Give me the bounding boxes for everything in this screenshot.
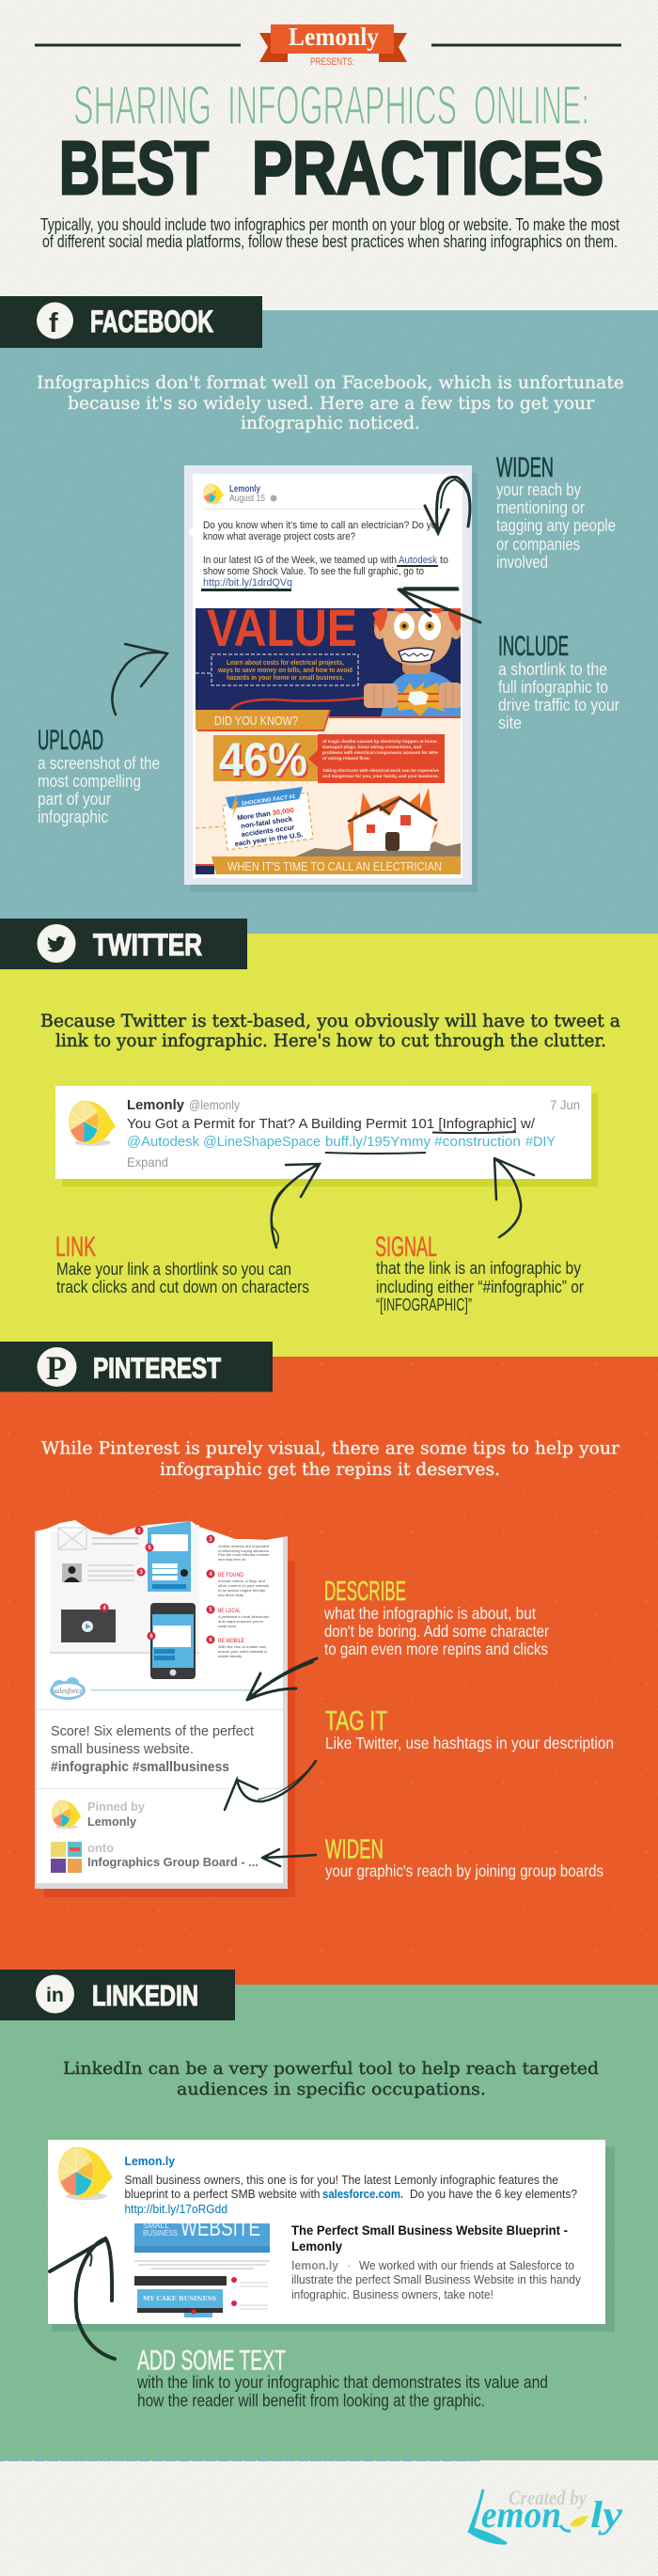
wireframe illustration: 6 [149, 1634, 153, 1640]
wireframe illustration: 5 [148, 1546, 151, 1551]
title: sharing infographics online: INFOGRAPHICS [227, 75, 457, 136]
panel: tweet screenshot [55, 1086, 598, 1186]
callout: shocking fact: accidents occur [241, 823, 295, 839]
callout: describe: DESCRIBE [324, 1577, 406, 1607]
panel: tweet screenshot: You Got a Permit for That? A Building Permit 101 [Infographic] w/ [127, 1116, 536, 1132]
pinterest intro text [41, 1438, 620, 1480]
post text: to [440, 555, 448, 566]
avatar: lemon [64, 1099, 116, 1148]
linked article title and description: · [347, 2259, 351, 2272]
heading: value: VALUE [207, 598, 357, 657]
logo: salesforce cloud [50, 1677, 257, 1700]
post text [124, 2174, 577, 2216]
callout: add some text: ADD SOME TEXT [137, 2345, 286, 2377]
wireframe illustration: and drive visits. [218, 1594, 244, 1597]
callout: widen: mentioning or [496, 498, 585, 517]
callout: signal: “[INFOGRAPHIC]” [376, 1296, 472, 1314]
twitter intro text: Because Twitter is text-based, you obviously will have to tweet a [40, 1011, 620, 1031]
red wire [230, 698, 367, 711]
wireframe illustration: mobile-friendly. [218, 1655, 243, 1658]
linked article title and description: Lemonly [291, 2239, 342, 2254]
section label: linkedin: LINKEDIN [92, 1979, 198, 2012]
callout: add some text [136, 2345, 548, 2411]
title: best practices: BEST [59, 126, 209, 210]
panel: tweet screenshot: buff.ly/195Ymmy [325, 1134, 431, 1150]
linkedin intro text [63, 2059, 599, 2099]
callout: include [498, 631, 619, 732]
callout: describe: to gain even more repins and clicks [324, 1640, 548, 1658]
linked article title and description: lemon.ly [291, 2259, 338, 2272]
stat block: 46 percent: problems with electrical components account for 66% [322, 750, 438, 755]
panel: tweet screenshot: @Autodesk [127, 1134, 199, 1150]
post text: http://bit.ly/1drdQVq [203, 577, 292, 589]
banner: when it's time to call an electrician: WHEN IT'S TIME TO CALL AN ELECTRICIAN [227, 859, 442, 873]
linked article title and description: We worked with our friends at Salesforce to [359, 2259, 574, 2272]
arrow: signal [494, 1158, 534, 1237]
post text: salesforce.com. [322, 2188, 403, 2201]
pin description [51, 1723, 255, 1775]
callout: include: full infographic to [498, 678, 608, 697]
arrow: tag it [225, 1761, 316, 1810]
callout: include: drive traffic to your [498, 696, 619, 715]
callout: shocking fact: non-fatal shock [241, 814, 294, 830]
linked article title and description: illustrate the perfect Small Business Website in this handy [291, 2273, 582, 2286]
thumbnail: website blueprint: SMALL [143, 2222, 170, 2230]
callout: shocking fact: More than 30,000 [237, 806, 294, 823]
callout: signal: that the link is an infographic by [376, 1259, 581, 1278]
wireframe illustration: easily found. [218, 1625, 237, 1628]
callout: link: Make your link a shortlink so you can [56, 1260, 291, 1279]
panel: pinterest pin screenshot [35, 1520, 295, 1897]
pinterest intro text: While Pinterest is purely visual, there are some tips to help your [41, 1438, 620, 1459]
pin description: Score! Six elements of the perfect [51, 1723, 255, 1739]
pinned by [49, 1799, 146, 1830]
wireframe illustration: 5 [209, 1608, 212, 1613]
dashed description box [196, 654, 358, 685]
panel: facebook post screenshot: Lemonly [229, 483, 260, 495]
stat block: 46 percent: of wiring-related fires. [322, 756, 370, 761]
callout: upload: a screenshot of the [38, 754, 160, 773]
callout: include: site [498, 714, 522, 732]
post text: show some Shock Value. To see the full graphic, go to [203, 566, 424, 577]
post text: Small business owners, this one is for you! The latest Lemonly infographic features the [124, 2174, 558, 2187]
stat block: 46 percent: Damaged plugs, loose wiring connections, and [322, 745, 421, 749]
arrow: describe [247, 1658, 317, 1700]
callout: tag it [325, 1706, 614, 1752]
wireframe illustration: 4 [102, 1606, 106, 1611]
avatar: lemon [53, 2145, 113, 2202]
wireframe illustration: BE FOUND [218, 1572, 243, 1579]
callout: widen: your reach by [496, 480, 581, 499]
callout: widen: WIDEN [496, 452, 554, 483]
section label: twitter: TWITTER [93, 928, 202, 962]
arrow: add some text [50, 2238, 115, 2359]
stat block: 46 percent [213, 734, 445, 783]
callout: tag it: Like Twitter, use hashtags in your description [325, 1734, 614, 1752]
board thumbnails: Infographics Group Board - ... [87, 1855, 258, 1869]
wireframe illustration: 4 [209, 1572, 212, 1578]
wireframe illustration: to be search engine friendly [218, 1589, 265, 1593]
twitter intro text: link to your infographic. Here's how to cut through the clutter. [55, 1030, 606, 1051]
thumbnail: website blueprint [134, 2215, 270, 2317]
panel: facebook post screenshot: August 15 [229, 493, 265, 504]
callout: widen [496, 452, 616, 572]
logo: salesforce cloud: salesforce [53, 1687, 84, 1695]
callout: shocking fact: SHOCKING FACT #1 [241, 794, 296, 808]
section label: linkedin: in [46, 1985, 64, 2006]
post text: Autodesk [399, 555, 437, 566]
arrow: widen group boards [262, 1849, 316, 1866]
banner: did you know: DID YOU KNOW? [214, 714, 298, 728]
board thumbnails [51, 1841, 258, 1873]
title: best practices [59, 126, 603, 210]
intro text [40, 215, 619, 251]
callout: describe [323, 1577, 549, 1658]
callout: widen group boards [325, 1835, 603, 1880]
section label: facebook: FACEBOOK [90, 305, 213, 338]
panel: tweet screenshot: #DIY [525, 1134, 556, 1150]
wireframe illustration: Online reviews are important [218, 1545, 269, 1548]
wireframe illustration: BE MOBILE [218, 1638, 245, 1644]
linkedin intro text: LinkedIn can be a very powerful tool to help reach targeted [63, 2059, 599, 2079]
wireframe illustration: in influencing buying decisions. [218, 1549, 270, 1553]
linkedin intro text: audiences in specific occupations. [177, 2080, 486, 2099]
panel: tweet screenshot: Lemonly [127, 1097, 185, 1113]
band: linkedin section background [0, 1985, 658, 2460]
linked article title and description: infographic. Business owners, take note! [291, 2288, 494, 2301]
wireframe illustration: and show them off. [218, 1558, 246, 1562]
board thumbnails: onto [87, 1841, 114, 1855]
wireframe illustration: Pick the most relevant reviews [218, 1553, 269, 1557]
post text: In our latest IG of the Week, we teamed up with [203, 555, 397, 566]
callout: widen group boards: your graphic's reach by joining group boards [325, 1861, 603, 1880]
thumbnail: website blueprint: BUSINESS [143, 2229, 178, 2238]
wireframe illustration: 1 [137, 1529, 141, 1534]
callout: describe: what the infographic is about, but [323, 1604, 536, 1623]
logo: created by lemonly: emon [481, 2493, 561, 2536]
logo: created by lemonly: Created by [509, 2486, 587, 2509]
section label: pinterest [0, 1342, 273, 1391]
arrow: upload [112, 644, 167, 715]
callout: describe: don't be boring. Add some character [324, 1622, 549, 1641]
wireframe illustration: A presence in local directories [218, 1615, 269, 1619]
callout: upload: most compelling [38, 772, 141, 791]
twitter intro text [40, 1011, 620, 1051]
callout: signal [375, 1232, 584, 1314]
wireframe illustration: With the rise of mobile use, [218, 1645, 267, 1649]
callout: add some text: how the reader will benefit from looking at the graphic. [137, 2392, 485, 2411]
wireframe illustration: Include videos, a blog, and [218, 1579, 265, 1583]
wireframe illustration: and maps ensures you're [218, 1620, 263, 1624]
post text: Do you know when it's time to call an electrician? Do you [203, 520, 442, 531]
wireframe illustration: ensure your entire website is [218, 1650, 267, 1654]
callout: shocking fact: each year in the U.S. [234, 830, 304, 848]
arrow: link [272, 1164, 320, 1248]
title: sharing infographics online [73, 75, 589, 136]
header: lemonly presents ribbon: PRESENTS: [310, 56, 354, 68]
section label: twitter [0, 919, 247, 969]
facebook intro text [37, 372, 624, 433]
panel: tweet screenshot: Expand [127, 1154, 168, 1170]
thumbnail: website blueprint: WEBSITE [180, 2215, 260, 2241]
callout: tag it: TAG IT [325, 1706, 387, 1736]
avatar: lemonly [201, 483, 224, 505]
pin description: #infographic #smallbusiness [51, 1759, 229, 1775]
wireframe illustration: 6 [209, 1638, 212, 1643]
panel: tweet screenshot: @lemonly [189, 1097, 240, 1112]
thumbnail: website blueprint: MY CAKE BUSINESS [143, 2296, 216, 2302]
callout: widen: involved [496, 553, 548, 572]
callout: link: LINK [55, 1232, 96, 1263]
post text: know what average project costs are? [203, 531, 355, 542]
logo: created by lemonly [468, 2486, 622, 2543]
pinterest intro text: infographic get the repins it deserves. [160, 1459, 500, 1480]
banner: did you know [196, 710, 331, 731]
title: sharing infographics online: SHARING [73, 75, 212, 136]
pin description: small business website. [51, 1741, 194, 1757]
callout: shocking fact [196, 787, 313, 850]
wireframe illustration: other content on your website [218, 1584, 269, 1588]
callout: signal: SIGNAL [375, 1232, 437, 1263]
callout: upload: part of your [38, 790, 111, 809]
panel: facebook post screenshot [184, 465, 478, 892]
character illustration [364, 608, 462, 717]
wireframe illustration: BE LOCAL [218, 1608, 241, 1614]
dashed description box: Learn about costs for electrical projects, [227, 660, 344, 667]
arrow: include [399, 588, 480, 622]
callout: link [55, 1232, 309, 1296]
header: lemonly presents ribbon [35, 23, 621, 68]
dashed description box: hazards in your home or small business. [227, 675, 344, 682]
stat block: 46 percent: Taking shortcuts with electrical work can be expensive [322, 768, 440, 773]
wireframe illustration [50, 1521, 270, 1679]
facebook intro text: infographic noticed. [241, 413, 420, 433]
callout: signal: including either “#infographic” or [376, 1278, 584, 1296]
panel: tweet screenshot: 7 Jun [550, 1097, 580, 1112]
post text: http://bit.ly/17oRGdd [124, 2203, 227, 2216]
callout: upload: UPLOAD [38, 725, 103, 756]
wireframe illustration: 3 [209, 1537, 212, 1543]
banner: when it's time to call an electrician [196, 856, 461, 874]
facebook intro text: because it's so widely used. Here are a few tips to get your [68, 393, 595, 414]
section label: facebook [0, 296, 262, 348]
linked article title and description: The Perfect Small Business Website Blueprint - [291, 2223, 568, 2238]
section label: facebook: f [49, 308, 58, 338]
dashed description box: ways to save money on bills, and how to avoid [217, 668, 352, 674]
panel: linkedin post screenshot [48, 2140, 615, 2332]
callout: upload: infographic [38, 808, 108, 826]
stat block: 46 percent: of tragic deaths caused by electricity happen at home. [322, 739, 438, 744]
callout: upload [38, 725, 160, 826]
callout: link: track clicks and cut down on characters [56, 1278, 309, 1296]
panel: tweet screenshot: @LineShapeSpace [203, 1134, 321, 1150]
callout: include: INCLUDE [498, 631, 569, 662]
illustration: burning house [293, 788, 461, 857]
section label: linkedin [0, 1970, 235, 2020]
section label: pinterest: PINTEREST [93, 1352, 221, 1384]
band: pinterest section background [0, 1357, 658, 1985]
callout: widen: tagging any people [496, 516, 616, 535]
stat block: 46 percent: and dangerous for you, your family, and your business. [322, 774, 439, 778]
linked article title and description [291, 2223, 582, 2301]
facebook intro text: Infographics don't format well on Facebook, which is unfortunate [37, 372, 624, 393]
pinned by: Lemonly [87, 1814, 137, 1829]
arrow: widen [425, 477, 470, 533]
panel: tweet screenshot: #construction [434, 1134, 521, 1150]
header: lemonly presents ribbon: Lemonly [289, 23, 379, 51]
callout: widen: or companies [496, 535, 580, 554]
stat block: 46 percent: 46% [221, 735, 309, 788]
zigzag border above footer [0, 2456, 480, 2461]
callout: include: a shortlink to the [498, 660, 607, 679]
panel: linkedin post screenshot: Lemon.ly [124, 2154, 176, 2168]
band: twitter section background [0, 934, 658, 1357]
post text: blueprint to a perfect SMB website with [124, 2188, 321, 2201]
section label: pinterest: P [46, 1349, 67, 1387]
band: facebook section background [0, 310, 658, 934]
callout: widen group boards: WIDEN [325, 1835, 384, 1865]
post text [203, 520, 448, 589]
callout: add some text: with the link to your infographic that demonstrates its value and [136, 2373, 548, 2392]
image: shock value infographic crop [196, 598, 462, 874]
pinned by: Pinned by [87, 1799, 146, 1814]
wireframe illustration: 3 [139, 1570, 143, 1576]
post text: Do you have the 6 key elements? [410, 2188, 577, 2201]
stat block: 46 percent: 46% [219, 733, 307, 786]
logo: created by lemonly: ly [590, 2493, 622, 2536]
